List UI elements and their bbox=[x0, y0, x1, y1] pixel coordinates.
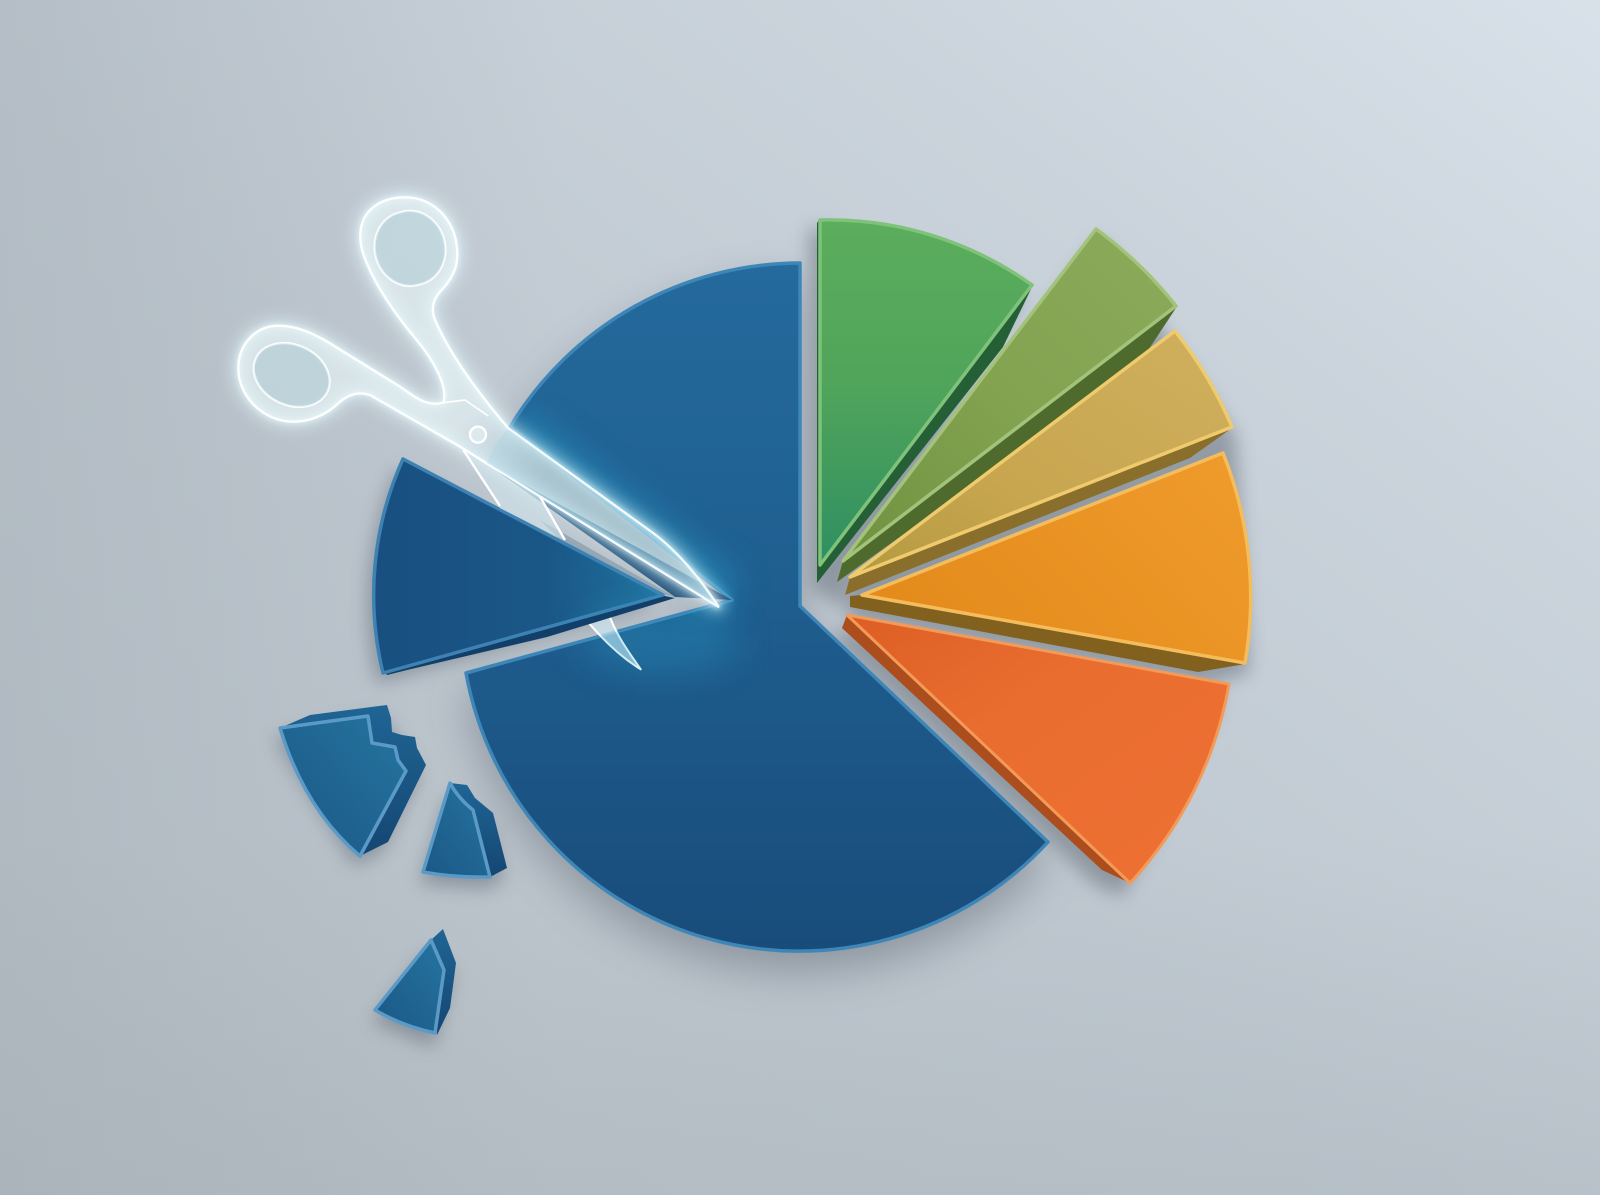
detached blue wedge side face bbox=[383, 595, 675, 675]
pie slice: large blue body bbox=[466, 263, 1048, 951]
scissors body with handles and main blade bbox=[238, 197, 718, 607]
cyan glow on blue along the blade bbox=[500, 430, 740, 674]
scissors pivot screw bbox=[470, 427, 486, 443]
soft cast shadows bbox=[274, 226, 1249, 1047]
second blade, upper part bbox=[463, 450, 565, 541]
red-orange slice bbox=[842, 615, 1229, 883]
green slice bbox=[817, 220, 1032, 583]
tan slice bbox=[845, 331, 1232, 595]
orange slice bbox=[850, 453, 1251, 672]
gap behind the cut bbox=[487, 464, 732, 600]
broken fragment 3 bbox=[375, 929, 456, 1035]
scissors bbox=[238, 197, 718, 607]
olive slice bbox=[837, 229, 1176, 582]
broken fragment 1 bbox=[280, 705, 426, 856]
broken fragment 2 bbox=[423, 783, 507, 877]
lower scissor blade tip bbox=[585, 613, 641, 669]
detached blue wedge bbox=[374, 459, 663, 673]
scissors glow bbox=[238, 197, 718, 607]
